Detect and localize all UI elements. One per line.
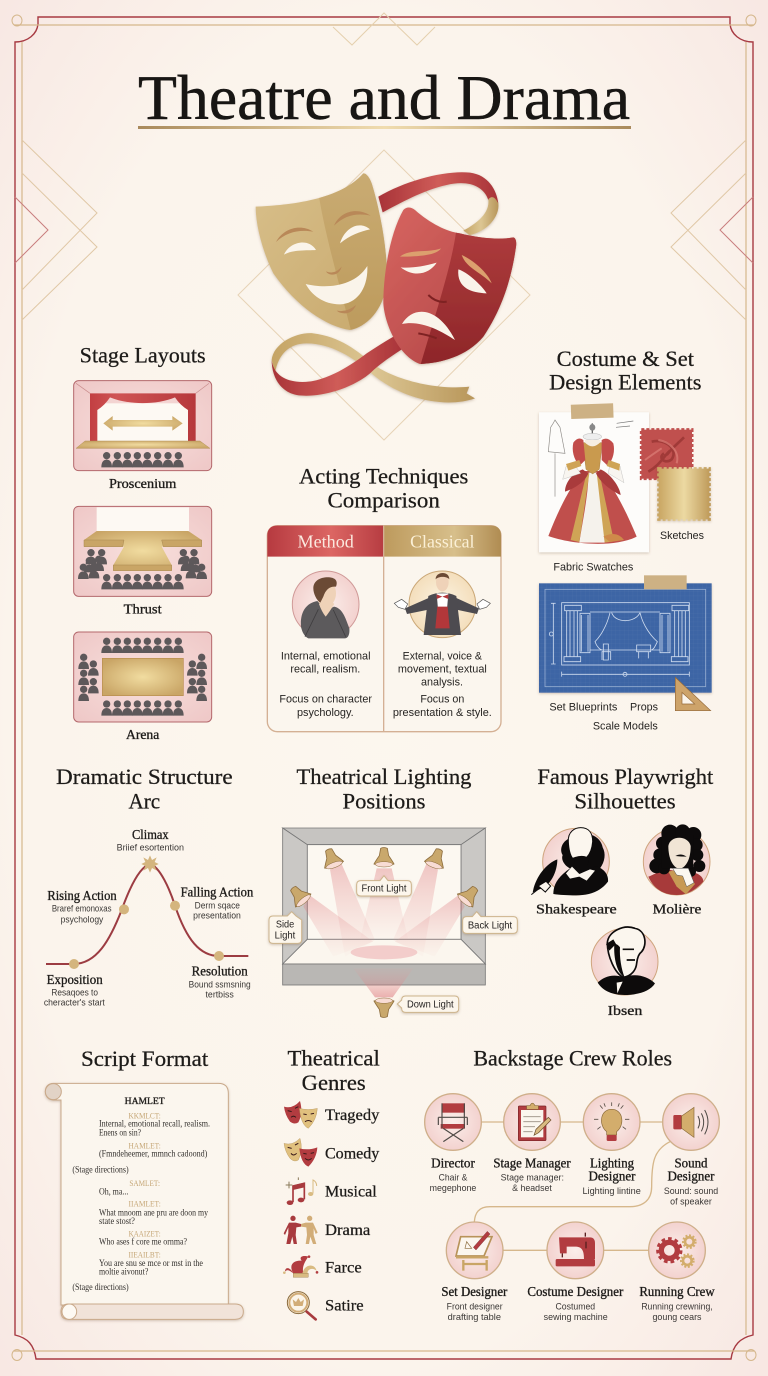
heading: Backstage Crew Roles bbox=[473, 1046, 672, 1071]
panel: dramatic structure arc bbox=[44, 764, 254, 1008]
heading: Design Elements bbox=[549, 369, 701, 394]
label: back light: Back Light bbox=[468, 920, 512, 931]
icon: method actor bbox=[292, 571, 359, 638]
label: side light: Light bbox=[275, 930, 296, 941]
role: costume designer: sewing machine bbox=[544, 1312, 608, 1322]
classical description bbox=[393, 650, 492, 719]
comparison table: Classical bbox=[410, 532, 474, 552]
classical description: Focus on bbox=[420, 694, 464, 706]
genre: tragedy: Tragedy bbox=[325, 1107, 379, 1124]
method description bbox=[279, 650, 372, 719]
script text: (Stage directions) bbox=[72, 1165, 129, 1175]
heading: Theatrical Lighting bbox=[296, 764, 471, 789]
role: sound designer: of speaker bbox=[670, 1196, 712, 1206]
role: sound designer: Sound bbox=[674, 1155, 708, 1170]
script text: IIAMLET: bbox=[128, 1200, 161, 1209]
heading: Comparison bbox=[327, 487, 440, 512]
panel: stage layouts bbox=[74, 343, 212, 742]
label: side light bbox=[269, 912, 302, 943]
role: set designer: Set Designer bbox=[441, 1284, 508, 1299]
arena diagram bbox=[74, 632, 212, 722]
comparison table: Method bbox=[297, 532, 354, 552]
labels: set design: Set Blueprints bbox=[549, 702, 618, 714]
classical description: presentation & style. bbox=[393, 707, 492, 719]
set blueprint bbox=[539, 583, 712, 693]
role: director: Director bbox=[431, 1155, 475, 1170]
rising action: psychology bbox=[61, 914, 104, 924]
classical description: External, voice & bbox=[403, 650, 482, 662]
genre: musical: Musical bbox=[325, 1184, 377, 1201]
script text: You are snu se mce or mst in the bbox=[99, 1258, 203, 1268]
heading: Silhouettes bbox=[574, 788, 676, 813]
stage box bbox=[283, 828, 485, 985]
heading: Genres bbox=[302, 1070, 366, 1095]
role: running crew bbox=[639, 1222, 715, 1322]
panel: playwright silhouettes bbox=[531, 764, 714, 1019]
role: stage manager bbox=[493, 1094, 571, 1193]
label: thrust: Thrust bbox=[124, 602, 162, 617]
genre: farce bbox=[283, 1255, 362, 1277]
label: down light bbox=[397, 996, 459, 1012]
label: fabric swatches: Fabric Swatches bbox=[553, 562, 634, 574]
heading: Theatrical bbox=[287, 1046, 380, 1071]
label: down light: Down Light bbox=[407, 1000, 454, 1011]
resolution: Resolution bbox=[192, 964, 248, 979]
script text: (Fmndeheemer, mmnch cadoond) bbox=[99, 1149, 207, 1159]
heading: Arc bbox=[128, 788, 160, 813]
climax: Briief esortention bbox=[117, 843, 184, 853]
label: side light: Side bbox=[276, 920, 295, 931]
script text: KAAIZET: bbox=[129, 1229, 161, 1238]
heading bbox=[287, 1046, 380, 1095]
method description: psychology. bbox=[297, 707, 354, 719]
label: back light bbox=[463, 912, 517, 933]
heading: Costume & Set bbox=[557, 346, 695, 371]
rising action: Braref emonoxas bbox=[52, 904, 112, 914]
resolution: tertbiss bbox=[205, 990, 234, 1000]
genre: comedy: Comedy bbox=[325, 1145, 379, 1162]
resolution bbox=[189, 964, 251, 1000]
exposition: cheracter's start bbox=[44, 998, 105, 1008]
role: costume designer: Costume Designer bbox=[527, 1284, 624, 1299]
panel: backstage crew bbox=[425, 1046, 719, 1322]
script text: IIEAILBT: bbox=[128, 1250, 161, 1259]
script text: HAMLET: bbox=[128, 1141, 161, 1150]
falling action: presentation bbox=[193, 911, 241, 921]
script text: Who ases f core me ornma? bbox=[99, 1237, 187, 1247]
comparison table bbox=[267, 526, 501, 732]
exposition: Resaqoes to bbox=[51, 987, 98, 997]
role: stage manager: Stage Manager bbox=[493, 1155, 571, 1170]
thrust diagram bbox=[74, 506, 212, 596]
lamps bbox=[285, 846, 483, 1017]
moliere portrait bbox=[643, 824, 710, 895]
heading: Stage Layouts bbox=[80, 343, 206, 368]
heading bbox=[56, 764, 233, 813]
role: running crew: Running crewning, bbox=[641, 1302, 713, 1312]
genre: satire bbox=[287, 1292, 364, 1319]
label: arena: Arena bbox=[126, 727, 159, 742]
role: running crew: goung cears bbox=[652, 1312, 702, 1322]
labels: set design: Scale Models bbox=[593, 720, 658, 732]
role: costume designer: Costumed bbox=[555, 1302, 595, 1312]
title: Theatre and Drama bbox=[138, 63, 630, 133]
role: lighting designer bbox=[582, 1094, 641, 1196]
label: shakespeare: Shakespeare bbox=[536, 902, 617, 917]
panel: theatrical lighting bbox=[269, 764, 517, 1017]
role: director: megephone bbox=[430, 1183, 476, 1193]
label: proscenium: Proscenium bbox=[109, 476, 177, 491]
role: stage manager: & headset bbox=[512, 1183, 552, 1193]
script text: moltie aivonut? bbox=[99, 1267, 148, 1277]
script text: SAMLET: bbox=[129, 1179, 160, 1188]
role: costume designer bbox=[527, 1222, 624, 1322]
role: lighting designer: Lighting bbox=[590, 1155, 634, 1170]
tape bbox=[644, 575, 687, 589]
role: set designer: drafting table bbox=[448, 1312, 501, 1322]
ibsen portrait bbox=[591, 927, 658, 995]
labels: set design: Props bbox=[630, 702, 658, 714]
script text: state stost? bbox=[99, 1216, 135, 1226]
rising action: Rising Action bbox=[47, 888, 117, 903]
arc curve bbox=[46, 855, 248, 969]
rising action bbox=[47, 888, 117, 924]
label: front light bbox=[357, 876, 411, 896]
label: sketches: Sketches bbox=[660, 530, 704, 542]
genre: comedy bbox=[284, 1138, 379, 1167]
panel: acting techniques bbox=[267, 463, 501, 732]
role: lighting designer: Designer bbox=[588, 1169, 636, 1184]
role: sound designer: Designer bbox=[667, 1169, 715, 1184]
heading bbox=[549, 346, 701, 394]
heading bbox=[537, 764, 714, 813]
falling action: Derm sqace bbox=[195, 901, 240, 911]
method description: recall, realism. bbox=[290, 664, 360, 676]
genre: drama: Drama bbox=[325, 1222, 370, 1239]
heading: Famous Playwright bbox=[537, 764, 714, 789]
script text: HAMLET bbox=[125, 1097, 165, 1107]
genre: farce: Farce bbox=[325, 1259, 362, 1276]
script text: (Stage directions) bbox=[72, 1282, 129, 1292]
label: front light: Front Light bbox=[361, 884, 407, 895]
heading: Dramatic Structure bbox=[56, 764, 233, 789]
role: running crew: Running Crew bbox=[639, 1284, 715, 1299]
labels: set design bbox=[549, 702, 658, 732]
icon: comedy and tragedy masks bbox=[256, 172, 516, 402]
proscenium diagram bbox=[74, 381, 212, 471]
light beams bbox=[303, 864, 465, 997]
script text: Oh, ma... bbox=[99, 1186, 128, 1196]
exposition bbox=[44, 972, 105, 1008]
genre: musical bbox=[286, 1177, 377, 1205]
role: lighting designer: Lighting lintine bbox=[582, 1186, 641, 1196]
method description: Focus on character bbox=[279, 694, 372, 706]
climax bbox=[117, 827, 184, 853]
script text: KKMLCT: bbox=[128, 1111, 161, 1120]
icon: classical actor bbox=[394, 571, 490, 638]
icon: set square bbox=[675, 677, 711, 711]
role: set designer: Front designer bbox=[447, 1302, 503, 1312]
role: stage manager: Stage manager: bbox=[501, 1173, 564, 1183]
heading bbox=[296, 764, 471, 813]
panel: script format bbox=[45, 1046, 243, 1319]
genre: tragedy bbox=[284, 1101, 379, 1128]
shakespeare portrait bbox=[531, 828, 609, 895]
role: set designer bbox=[441, 1222, 508, 1322]
classical description: analysis. bbox=[421, 677, 463, 689]
tape bbox=[571, 403, 614, 419]
connectors bbox=[453, 1122, 691, 1250]
heading: Script Format bbox=[81, 1046, 209, 1071]
heading: Positions bbox=[342, 788, 425, 813]
role: director: Chair & bbox=[439, 1173, 468, 1183]
role: director bbox=[425, 1094, 481, 1193]
script text: Enens on sin? bbox=[99, 1127, 141, 1137]
falling action bbox=[181, 885, 254, 921]
fabric swatches bbox=[641, 430, 709, 519]
exposition: Exposition bbox=[47, 972, 103, 987]
panel: costume and set design bbox=[539, 346, 712, 732]
falling action: Falling Action bbox=[181, 885, 254, 900]
script text: Internal, emotional recall, realism. bbox=[99, 1119, 210, 1129]
script text bbox=[72, 1097, 210, 1292]
genre: drama bbox=[284, 1216, 370, 1244]
resolution: Bound ssmsning bbox=[189, 980, 251, 990]
classical description: movement, textual bbox=[398, 664, 487, 676]
label: ibsen: Ibsen bbox=[608, 1004, 642, 1019]
method description: Internal, emotional bbox=[281, 650, 370, 662]
genre: satire: Satire bbox=[325, 1298, 364, 1315]
role: sound designer bbox=[663, 1094, 719, 1206]
scroll bbox=[45, 1083, 243, 1319]
costume sketch bbox=[539, 412, 649, 552]
panel: theatrical genres bbox=[283, 1046, 380, 1319]
role: sound designer: Sound: sound bbox=[664, 1186, 718, 1196]
climax: Climax bbox=[132, 827, 169, 842]
heading bbox=[299, 463, 468, 512]
label: moliere: Molière bbox=[653, 902, 701, 917]
script text: What mnoom ane pru are doon my bbox=[99, 1207, 208, 1217]
heading: Acting Techniques bbox=[299, 463, 468, 488]
